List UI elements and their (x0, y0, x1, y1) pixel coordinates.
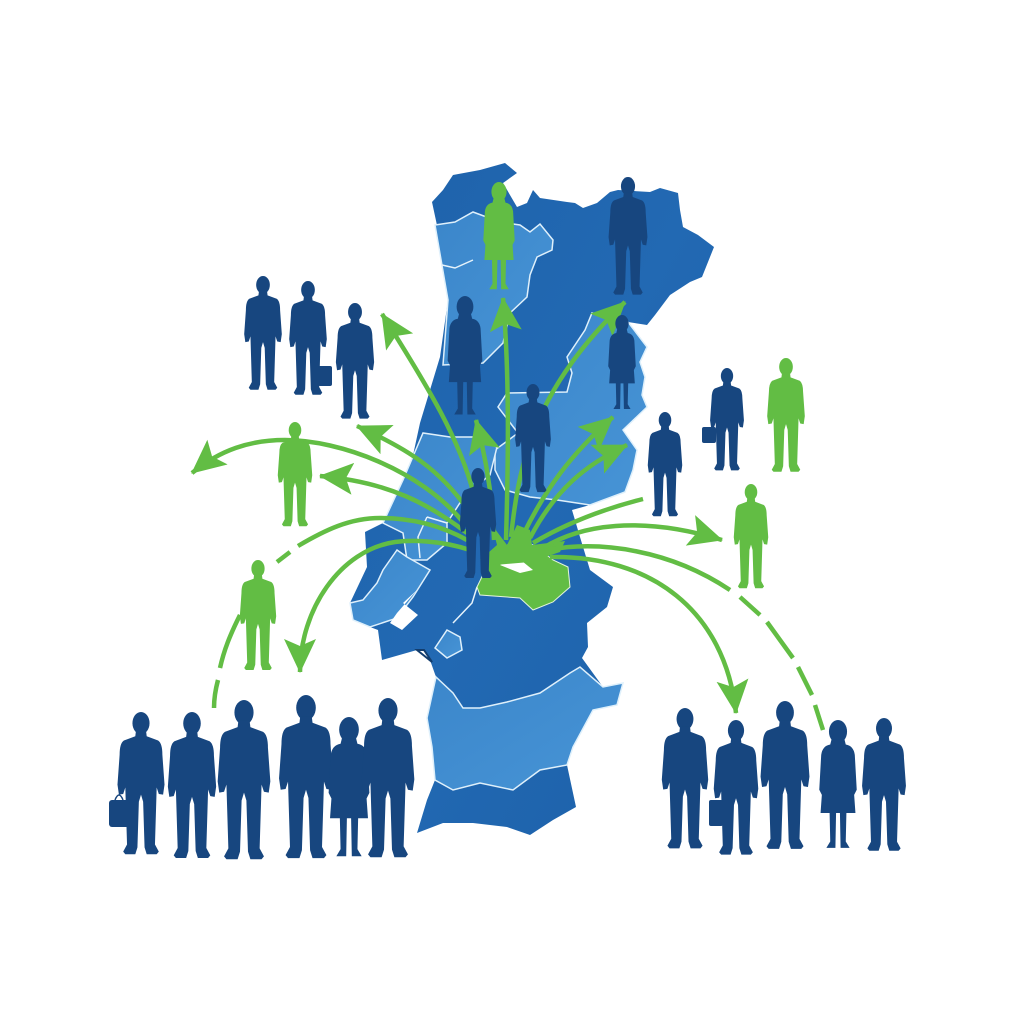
arrow: north-east middle (523, 417, 613, 535)
person (862, 718, 906, 851)
arrow: north-east low (530, 445, 627, 538)
arrow: north-east top (511, 302, 625, 537)
person (279, 695, 333, 858)
group: lower-left crowd (109, 695, 414, 859)
person with bag (289, 281, 332, 395)
green person (767, 358, 805, 472)
navy person at hub (460, 468, 496, 578)
region: Alentejo (427, 667, 623, 790)
region boundary: inner north-west line (442, 260, 473, 268)
group: right-hand people (648, 358, 805, 588)
region: small enclave (435, 630, 462, 658)
arrow: short east line (533, 499, 643, 543)
green region cut-out (500, 557, 533, 573)
person with bag (709, 720, 758, 855)
person (244, 276, 282, 390)
region: north-west (435, 212, 553, 365)
region: east centre (495, 313, 647, 505)
arrow: north (503, 298, 508, 540)
green person north (483, 182, 515, 289)
region: Lisbon peninsula (350, 550, 430, 627)
region: green central (477, 537, 570, 610)
hub burst (480, 525, 565, 565)
navy woman (648, 412, 682, 516)
arrow: south-west (300, 541, 470, 672)
arrow: south-east (550, 557, 736, 713)
person (761, 701, 809, 849)
arrow: east (543, 525, 722, 548)
navy person with bag (702, 368, 744, 470)
person with bag (109, 712, 165, 854)
arrow: short north (476, 420, 494, 540)
woman (329, 717, 369, 856)
map of Portugal (350, 163, 714, 835)
group: upper-left people (244, 276, 374, 419)
arrow: dashed to lower-right group (548, 546, 823, 730)
people on the map (448, 177, 647, 578)
estuary (390, 590, 418, 630)
green woman (240, 560, 276, 670)
group: lower-right crowd (662, 701, 906, 855)
green person (278, 422, 312, 526)
region boundary: south of hub (453, 587, 477, 623)
arrow: west (320, 476, 467, 533)
navy woman (448, 296, 482, 415)
person (362, 698, 414, 857)
region boundary: inner west line (418, 517, 447, 558)
navy person north-east (609, 177, 647, 295)
navy woman east (608, 315, 636, 409)
arrow: dashed from lower-left group (214, 518, 467, 708)
person (662, 708, 708, 848)
navy person centre (515, 384, 551, 492)
southern estuary (417, 650, 432, 662)
group: green people on the left (240, 422, 312, 670)
person (218, 700, 270, 859)
region: west centre (383, 433, 497, 560)
person (168, 712, 216, 858)
map: base outline (350, 163, 714, 835)
arrow: far west (192, 440, 463, 522)
arrow: north-west middle (357, 426, 468, 510)
woman (819, 720, 857, 848)
arrows radiating from the central region (192, 298, 823, 730)
arrow: north-west long (382, 314, 474, 495)
green person lower (734, 484, 768, 588)
person (336, 303, 374, 419)
